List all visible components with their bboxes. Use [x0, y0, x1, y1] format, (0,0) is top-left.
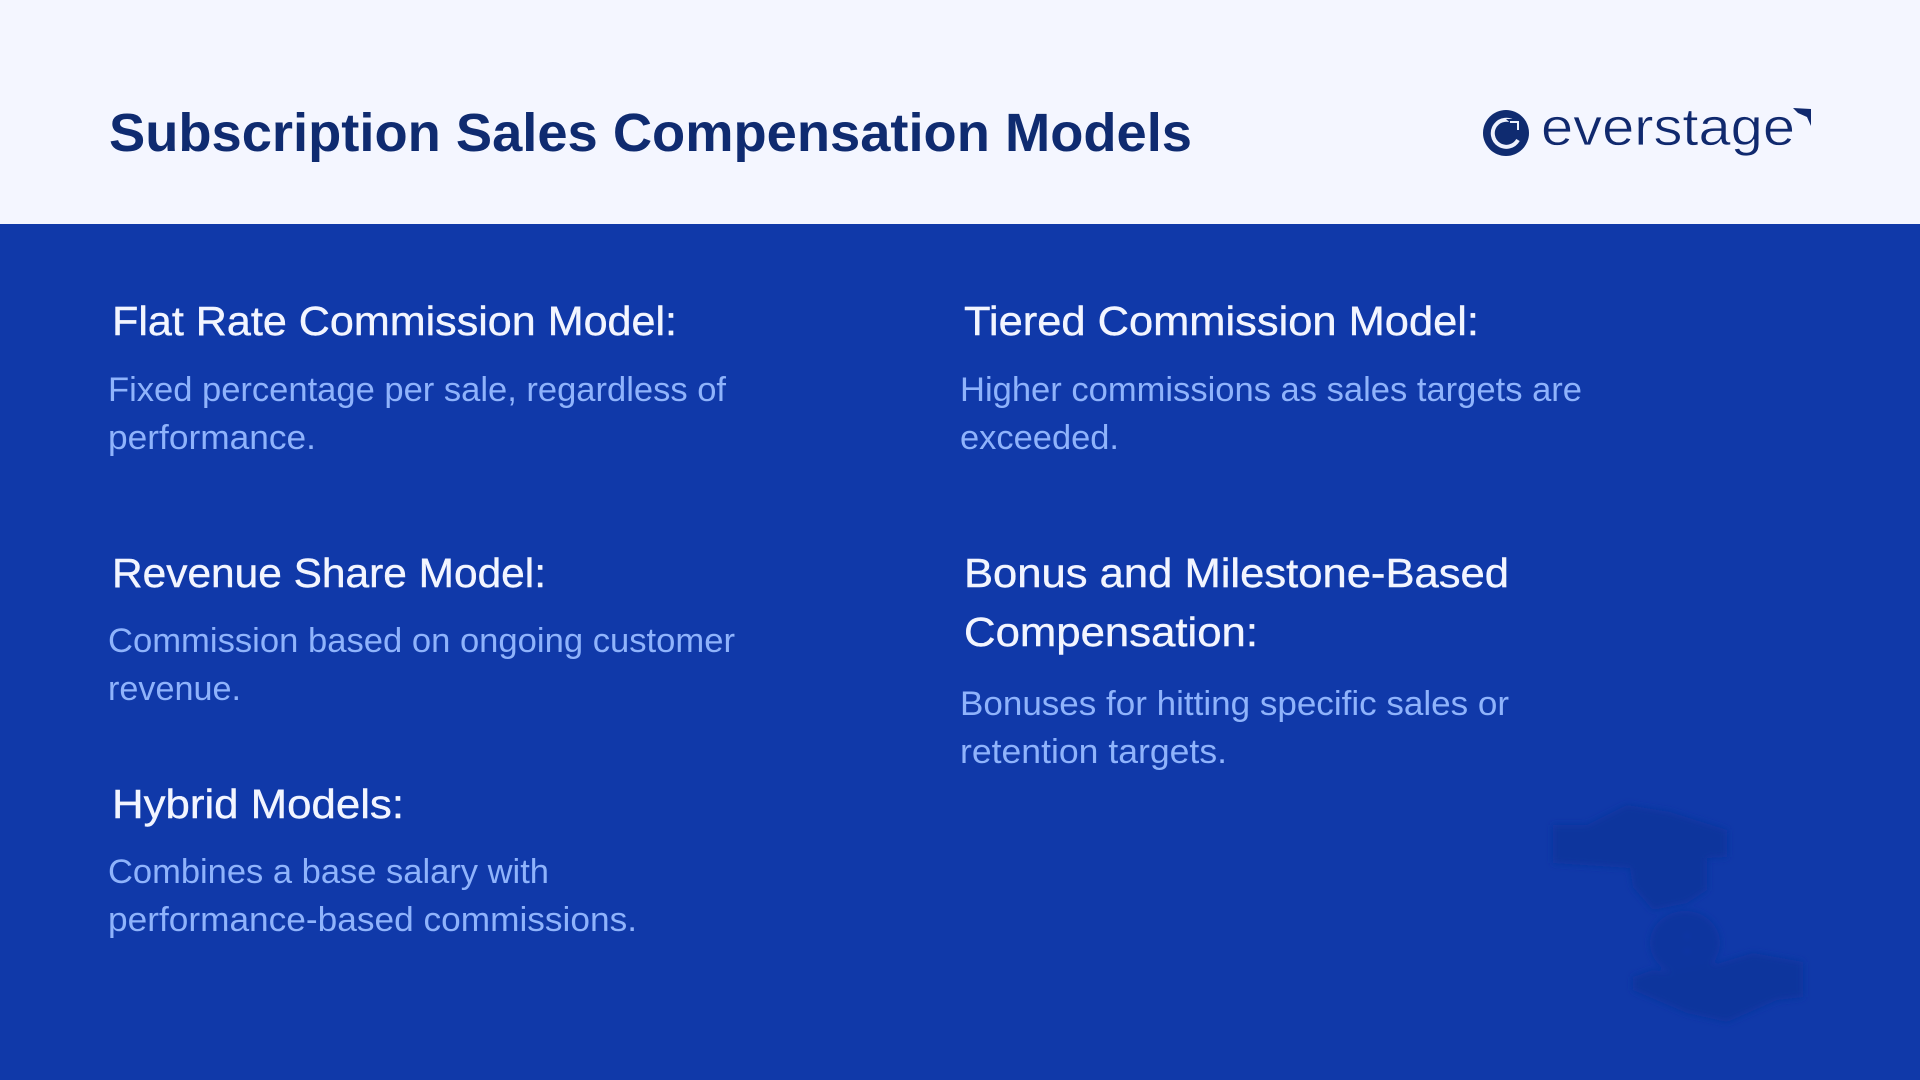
heading: Compensation:	[964, 609, 1258, 655]
logo: everstage	[1483, 98, 1811, 157]
description: retention targets.	[960, 733, 1227, 771]
heading: Tiered Commission Model:	[964, 298, 1479, 344]
description: exceeded.	[960, 419, 1119, 457]
description: revenue.	[108, 670, 241, 708]
heading: Revenue Share Model:	[112, 550, 546, 596]
description: performance.	[108, 419, 316, 457]
icon: logo mark	[1483, 110, 1529, 156]
description	[960, 371, 1582, 457]
description: performance-based commissions.	[108, 901, 637, 939]
description: Commission based on ongoing customer	[108, 622, 735, 660]
blue content panel	[0, 224, 1920, 1080]
title: Subscription Sales Compensation Models	[109, 103, 1192, 163]
description	[960, 685, 1509, 771]
description: Fixed percentage per sale, regardless of	[108, 371, 727, 409]
heading: Flat Rate Commission Model:	[112, 298, 677, 344]
header band	[0, 0, 1920, 224]
icon: hands holding coin	[1553, 805, 1803, 1022]
description	[108, 853, 637, 939]
heading: Bonus and Milestone-Based	[964, 550, 1509, 596]
panel: flat rate commission model	[108, 298, 727, 457]
description: Bonuses for hitting specific sales or	[960, 685, 1509, 723]
panel: tiered commission model	[960, 298, 1582, 457]
panel: bonus and milestone-based compensation	[960, 550, 1509, 771]
wordmark: everstage	[1541, 98, 1795, 157]
description: Higher commissions as sales targets are	[960, 371, 1582, 409]
icon: logo corner mark	[1793, 108, 1811, 126]
description	[108, 622, 735, 708]
description: Combines a base salary with	[108, 853, 549, 891]
panel: revenue share model	[108, 550, 735, 708]
heading: Hybrid Models:	[112, 781, 404, 827]
panel: hybrid models	[108, 781, 637, 939]
description	[108, 371, 727, 457]
heading	[964, 550, 1509, 655]
